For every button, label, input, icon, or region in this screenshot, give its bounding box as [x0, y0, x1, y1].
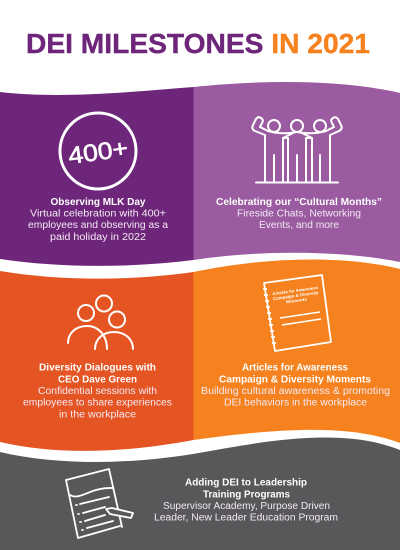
text: Leadership Training: Supervisor Academy, Purpose Driven [163, 501, 330, 512]
text: Diversity Dialogues: in the workplace [59, 410, 136, 420]
text: Diversity Dialogues [23, 362, 172, 420]
text: Observing MLK Day: Observing MLK Day [50, 197, 146, 208]
icon: 400+ circle: 400+ [67, 135, 130, 170]
text: Cultural Months: Celebrating our “Cultural Months” [216, 197, 382, 208]
text: Leadership Training: Training Programs [203, 490, 290, 500]
panel: Observing MLK Day [0, 87, 194, 266]
text: Cultural Months: Fireside Chats, Networking [237, 208, 361, 220]
text: Articles for Awareness: DEI behaviors in the workplace [224, 398, 367, 408]
text: Cultural Months: Events, and more [259, 220, 339, 231]
text: Diversity Dialogues: employees to share experiences [23, 398, 172, 408]
icon: spiral notebook [263, 275, 331, 351]
icon: group of people [252, 117, 342, 182]
text: Articles for Awareness: Articles for Awareness [242, 362, 348, 374]
text: Articles for Awareness [201, 362, 390, 408]
text: Leadership Training: Adding DEI to Leadership [185, 478, 307, 488]
text: Articles for Awareness: Building cultural awareness & promoting [201, 386, 390, 397]
panel: Articles for Awareness [194, 259, 400, 443]
panel: Leadership Training [0, 438, 400, 550]
icon: checklist and pencil [66, 469, 133, 538]
icon: spiral notebook: Articles for Awareness [272, 285, 319, 296]
title: DEI MILESTONES IN 2021 [26, 28, 370, 59]
text: Observing MLK Day [28, 197, 168, 243]
panel: Cultural Months [194, 82, 400, 262]
text: Observing MLK Day: paid holiday in 2022 [50, 232, 146, 243]
text: Diversity Dialogues: Diversity Dialogues with [39, 362, 156, 374]
panel: Diversity Dialogues [0, 271, 194, 451]
text: Observing MLK Day: Virtual celebration with 400+ [30, 208, 166, 220]
icon: 400+ circle [60, 113, 136, 189]
text: Observing MLK Day: employees and observing as a [28, 220, 168, 231]
icon: spiral notebook: Moments [286, 296, 308, 304]
text: Diversity Dialogues: CEO Dave Green [58, 374, 137, 386]
text: Diversity Dialogues: Confidential sessions with [38, 386, 157, 397]
text: Articles for Awareness: Campaign & Diversity Moments [219, 374, 371, 386]
text: Leadership Training: Leader, New Leader Education Program [154, 512, 338, 524]
icon: spiral notebook: Campaign & Diversity [273, 290, 320, 301]
text: Leadership Training [154, 478, 338, 524]
text: Cultural Months [216, 197, 382, 231]
icon: three people [68, 296, 133, 349]
